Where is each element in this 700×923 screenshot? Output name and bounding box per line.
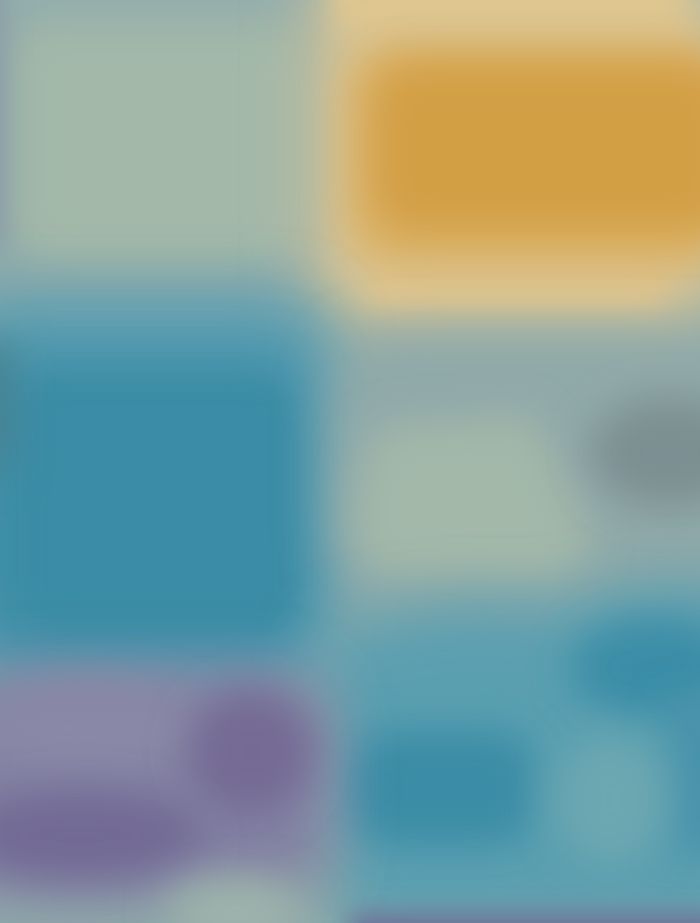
panel: right grey blob bbox=[590, 397, 700, 507]
panel: bottom purple strip bbox=[350, 914, 700, 923]
panel: centre right sage bbox=[340, 345, 700, 582]
panel: bottom sage blob bbox=[165, 876, 305, 923]
panel: lower left purple bbox=[0, 672, 330, 897]
panel: left teal bbox=[0, 295, 330, 690]
panel: top right orange bbox=[310, 0, 700, 325]
panel: top left sage bbox=[0, 0, 320, 265]
panel: lower right teal bbox=[320, 583, 700, 923]
